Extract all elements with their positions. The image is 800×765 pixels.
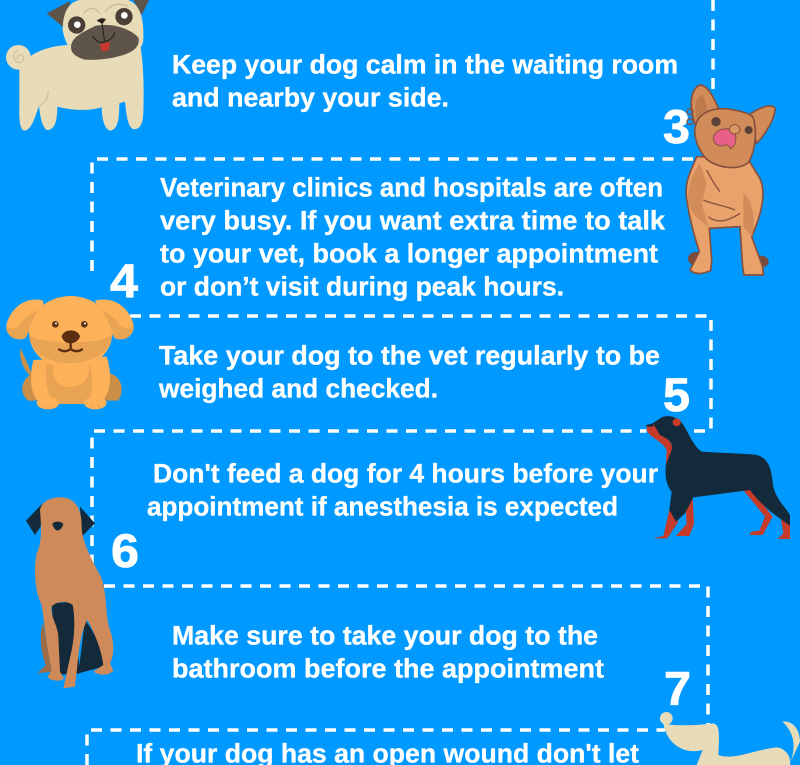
icon: pug [6, 0, 149, 131]
step 4 text: very busy. If you want extra time to talk [160, 206, 666, 236]
step 3 text: Keep your dog calm in the waiting room [172, 50, 678, 80]
number 3: 3 [663, 100, 690, 153]
step 3 text [172, 50, 678, 112]
icon: brown sitting dog [26, 497, 113, 688]
step 4 text [160, 172, 666, 302]
step 6 text: Don't feed a dog for 4 hours before your [153, 458, 658, 488]
step 6 text: appointment if anesthesia is expected [147, 492, 618, 522]
step 5 text [158, 340, 660, 404]
step 7 text: bathroom before the appointment [172, 654, 604, 684]
step 4 text: to your vet, book a longer appointment [160, 238, 658, 268]
step 4 text: Veterinary clinics and hospitals are often [160, 172, 663, 202]
step 5 text: Take your dog to the vet regularly to be [159, 340, 660, 370]
step 4 text: or don’t visit during peak hours. [160, 272, 564, 302]
step 6 text [147, 458, 658, 522]
step 7 text [172, 620, 604, 684]
icon: golden puppy [6, 296, 134, 409]
icon: cream dog cropped at bottom [660, 712, 800, 765]
number 7: 7 [664, 662, 691, 715]
number 5: 5 [663, 368, 690, 421]
step 5 text: weighed and checked. [158, 374, 438, 404]
step 3 text: and nearby your side. [172, 82, 449, 112]
number 4: 4 [110, 254, 138, 307]
icon: french bulldog [686, 85, 775, 275]
number 6: 6 [111, 524, 139, 577]
step 7 text: Make sure to take your dog to the [172, 620, 598, 650]
icon: rottweiler [646, 416, 790, 539]
